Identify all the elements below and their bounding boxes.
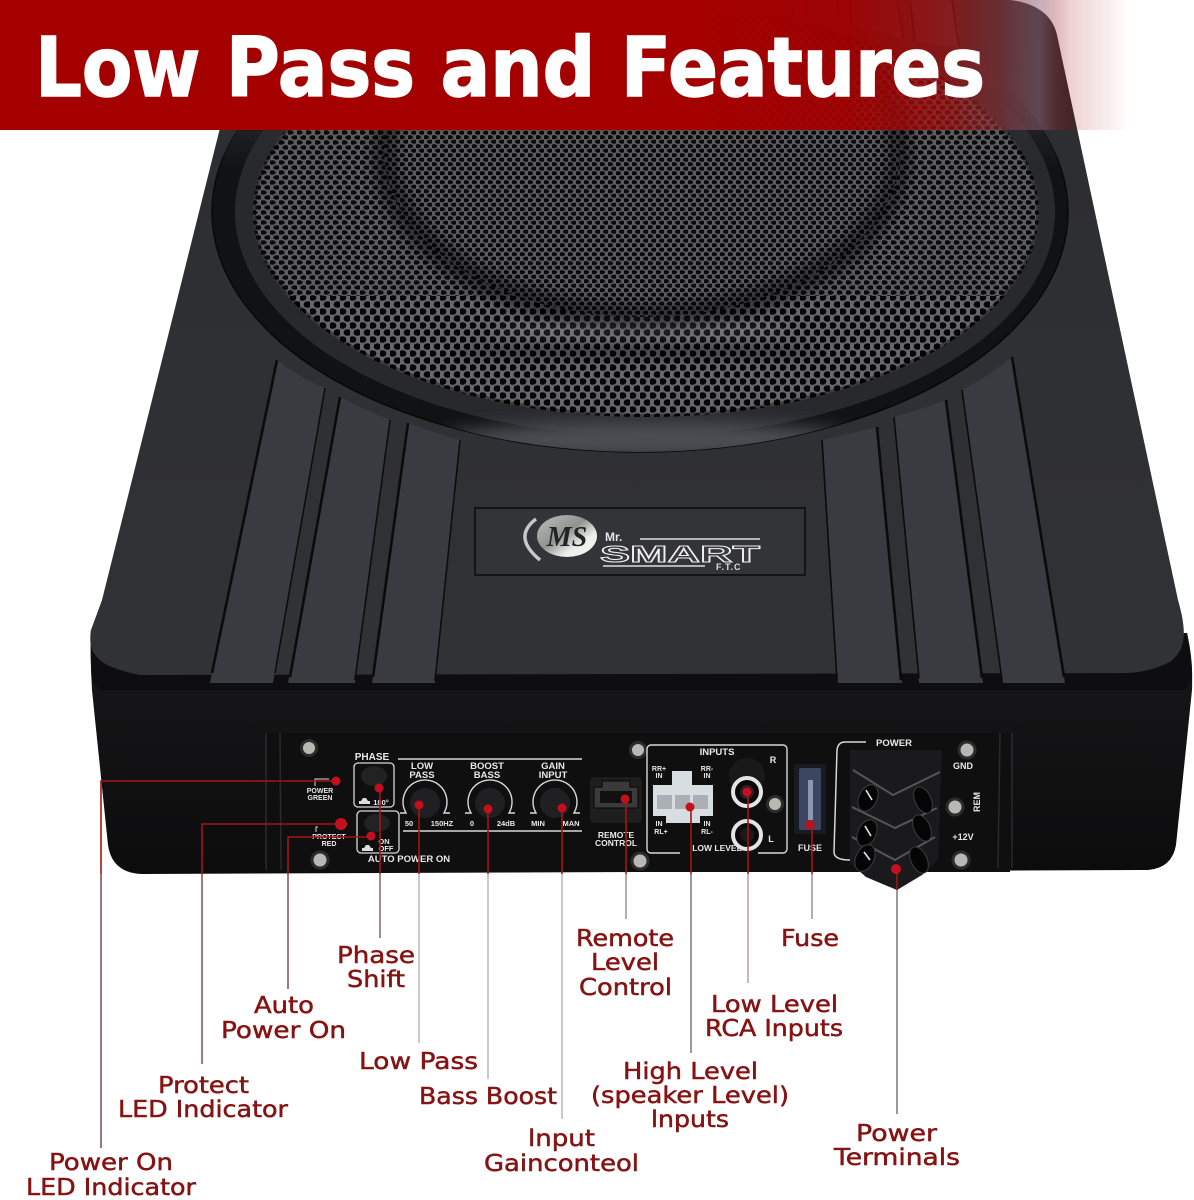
label: phase shift: Shift — [347, 967, 405, 993]
label: power terminals: Power — [856, 1121, 938, 1147]
RCA jacks — [729, 758, 765, 851]
callout labels — [26, 926, 960, 1200]
label: input gain control: Gainconteol — [484, 1151, 639, 1177]
label: power on LED: Power On — [49, 1150, 173, 1176]
phase switch: PHASE — [355, 752, 390, 763]
label: low pass: Low Pass — [359, 1049, 478, 1075]
power terminal frame: POWER — [876, 738, 912, 749]
low pass knob: 50 — [405, 819, 413, 828]
inputs block: R — [770, 755, 777, 765]
gain input knob — [530, 761, 580, 828]
label: protect LED — [118, 1073, 289, 1123]
boost bass knob — [465, 761, 516, 828]
label: protect LED: LED Indicator — [118, 1097, 289, 1123]
power terminal frame: REM — [972, 792, 982, 812]
logo plate — [475, 508, 805, 575]
remote control jack: CONTROL — [595, 838, 637, 848]
label: auto power on: Auto — [254, 993, 314, 1019]
power terminals — [850, 750, 942, 890]
speaker mesh grille — [253, 57, 1039, 417]
remote control jack — [590, 777, 642, 848]
label: low level RCA inputs — [705, 992, 843, 1042]
gain input knob: GAIN — [541, 761, 565, 772]
label: input gain control — [484, 1126, 639, 1177]
label: phase shift: Phase — [337, 943, 415, 969]
body front face — [91, 630, 1192, 874]
remote control jack: REMOTE — [598, 830, 635, 840]
label: power terminals — [833, 1121, 960, 1171]
boost bass knob: BOOST — [470, 761, 504, 772]
inputs block: RL- — [701, 829, 713, 836]
logo emblem: MS — [546, 522, 587, 553]
inputs block: LOW LEVEL — [692, 843, 742, 853]
leader lines and dots on panel — [101, 776, 901, 890]
logo wordmark — [600, 530, 760, 572]
label: fuse: Fuse — [781, 926, 839, 952]
auto power switch: ON — [378, 837, 390, 846]
low pass knob: LOW — [411, 761, 433, 772]
boost bass knob: BASS — [474, 770, 500, 781]
inputs block: IN — [656, 773, 662, 780]
inputs block: INPUTS — [700, 747, 734, 758]
LED labels — [307, 779, 346, 848]
label: auto power on: Power On — [221, 1018, 346, 1044]
mounting screws — [302, 740, 975, 869]
title banner — [0, 0, 1130, 130]
phase switch: 180° — [373, 798, 389, 807]
label: remote level control: Level — [591, 950, 659, 976]
label: phase shift — [337, 943, 415, 993]
inputs block: IN — [704, 773, 710, 780]
boost bass knob: 24dB — [497, 819, 516, 828]
logo wordmark: F.T.C — [716, 562, 742, 572]
label: high level inputs: High Level — [623, 1059, 758, 1085]
LED labels: PROTECT — [312, 834, 346, 841]
low pass knob: 150HZ — [431, 819, 454, 828]
gain input knob: MIN — [531, 819, 545, 828]
phase switch — [354, 752, 394, 807]
black shoulder band — [91, 630, 1192, 690]
power terminal frame — [834, 738, 982, 860]
LED labels: POWER — [307, 788, 333, 795]
label: remote level control: Control — [579, 975, 672, 1001]
label: low level RCA inputs: RCA Inputs — [705, 1016, 843, 1042]
power terminal frame: +12V — [952, 832, 974, 842]
LED labels: GREEN — [308, 795, 332, 802]
body top surface — [90, 0, 1184, 675]
high level connector — [653, 771, 713, 823]
logo wordmark: SMART — [600, 541, 760, 567]
LED labels: RED — [322, 841, 336, 848]
low pass knob — [400, 761, 454, 828]
label: high level inputs: lnputs — [651, 1107, 729, 1133]
label: input gain control: lnput — [528, 1126, 595, 1152]
logo emblem — [525, 515, 597, 560]
fuse — [794, 764, 826, 853]
label: remote level control — [576, 926, 674, 1001]
logo wordmark: Mr. — [605, 530, 622, 544]
rear control panel — [266, 733, 1012, 890]
fuse: FUSE — [798, 843, 822, 853]
label: high level inputs — [591, 1059, 789, 1133]
inputs block: RR+ — [652, 766, 666, 773]
label: power terminals: Terminals — [833, 1145, 960, 1171]
low pass knob: PASS — [409, 770, 435, 781]
inputs block: RL+ — [654, 829, 668, 836]
inputs block — [647, 745, 787, 856]
gain input knob: MAN — [562, 819, 580, 828]
boost bass knob: 0 — [470, 819, 474, 828]
gain input knob: INPUT — [539, 770, 567, 781]
inputs block: L — [768, 834, 774, 844]
inputs block: RR- — [701, 766, 714, 773]
label: bass boost: Bass Boost — [419, 1084, 557, 1110]
label: low level RCA inputs: Low Level — [711, 992, 838, 1018]
label: remote level control: Remote — [576, 926, 674, 952]
inner dish — [367, 60, 917, 334]
inputs block: IN — [704, 821, 710, 828]
subwoofer product photo — [90, 0, 1192, 890]
power terminal frame: GND — [953, 761, 974, 771]
top panel ribs — [210, 357, 1065, 683]
leader lines on white — [101, 874, 897, 1148]
label: protect LED: Protect — [158, 1073, 249, 1099]
label: auto power on — [221, 993, 346, 1044]
auto power switch: OFF — [378, 844, 394, 853]
inputs block: IN — [656, 821, 662, 828]
label: high level inputs: (speaker Level) — [591, 1083, 789, 1109]
auto power switch — [357, 811, 450, 865]
auto power switch: AUTO POWER ON — [368, 854, 450, 865]
label: power on LED — [26, 1150, 197, 1200]
speaker rim — [211, 122, 1069, 453]
far top ribs — [792, 0, 959, 47]
title: Low Pass and Features — [35, 21, 985, 116]
